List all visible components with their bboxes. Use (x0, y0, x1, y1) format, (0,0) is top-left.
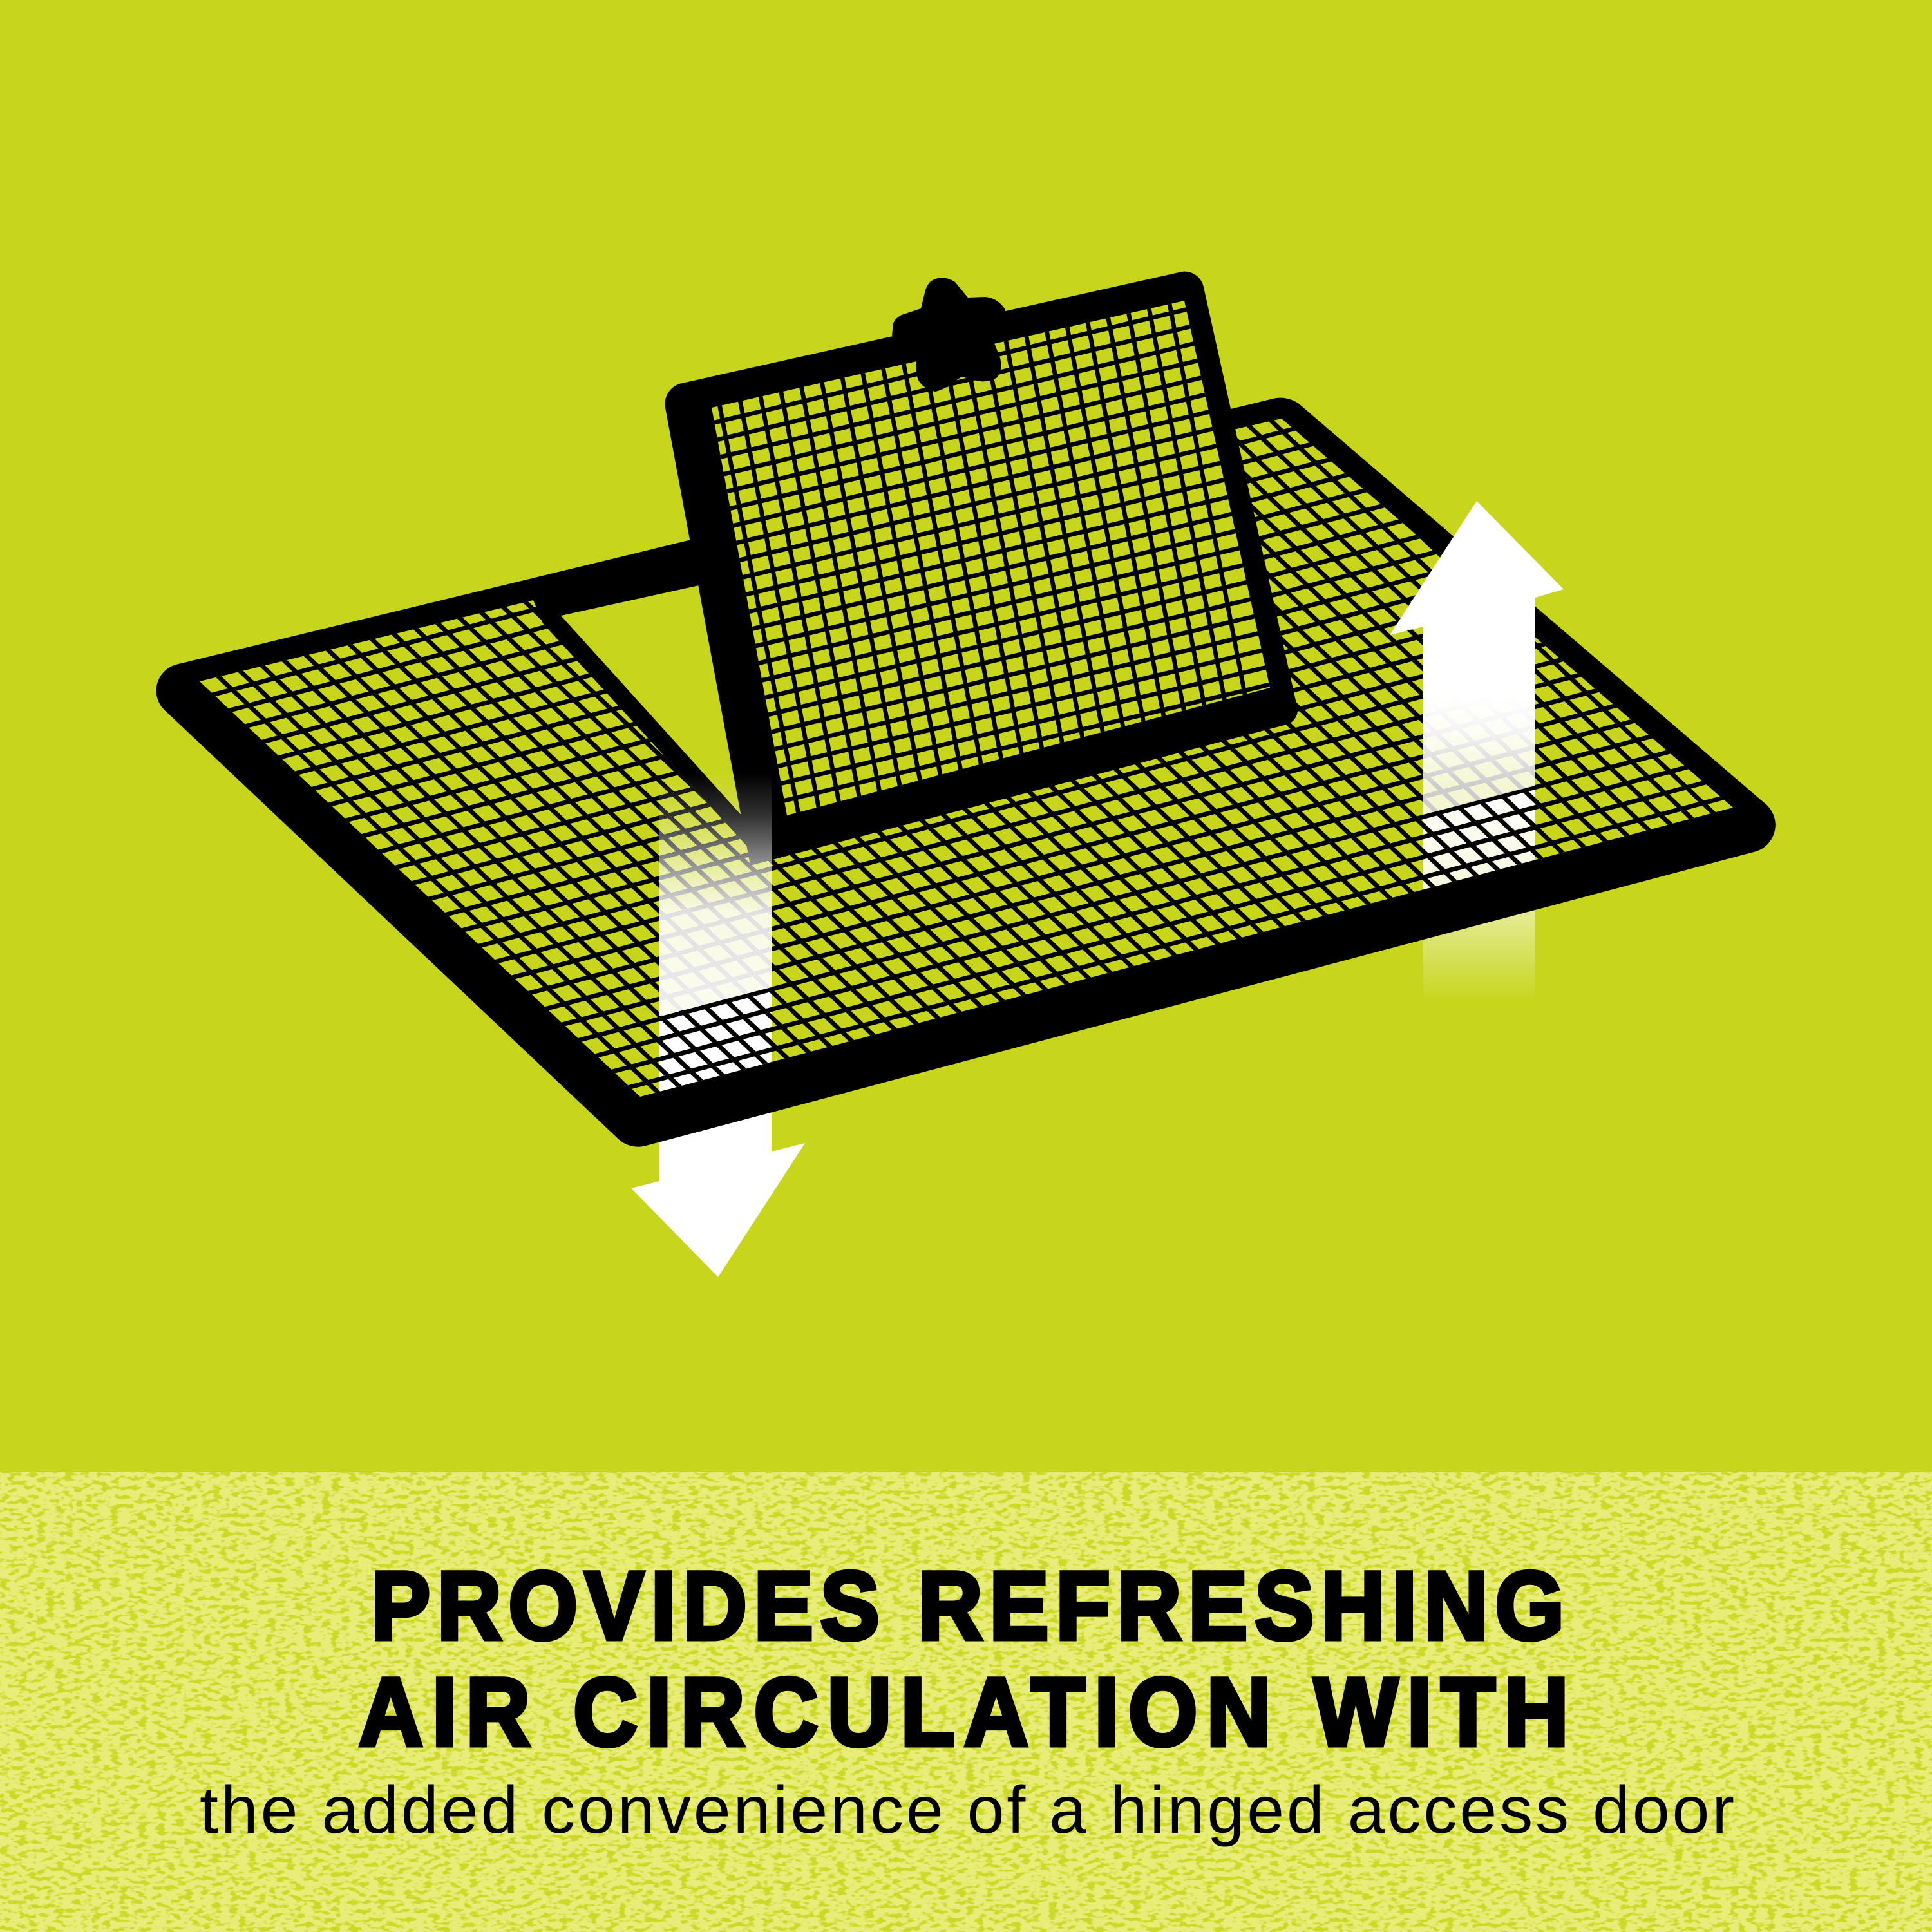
screen base frame (156, 398, 1776, 1147)
door mesh (712, 301, 1270, 815)
arrow: downward airflow head (631, 1088, 805, 1277)
hinged access door (665, 272, 1305, 866)
door frame (665, 272, 1298, 866)
heading line 1: PROVIDES REFRESHING (371, 1552, 1564, 1660)
heading line 2: AIR CIRCULATION WITH (359, 1658, 1569, 1766)
door latch knob (892, 278, 1005, 392)
textured caption band (0, 1472, 1932, 1932)
arrow: upward airflow tail fading below frame (1423, 889, 1535, 1001)
subheading: the added convenience of a hinged access door (200, 1773, 1734, 1848)
up arrow fading shaft (1423, 696, 1535, 815)
arrow: upward airflow (1390, 501, 1564, 815)
base mesh (200, 419, 1733, 1097)
heading (359, 1552, 1569, 1766)
door opening (561, 585, 744, 818)
up arrow head and solid shaft (1390, 501, 1564, 697)
arrow: downward airflow fading shaft (659, 773, 772, 1016)
